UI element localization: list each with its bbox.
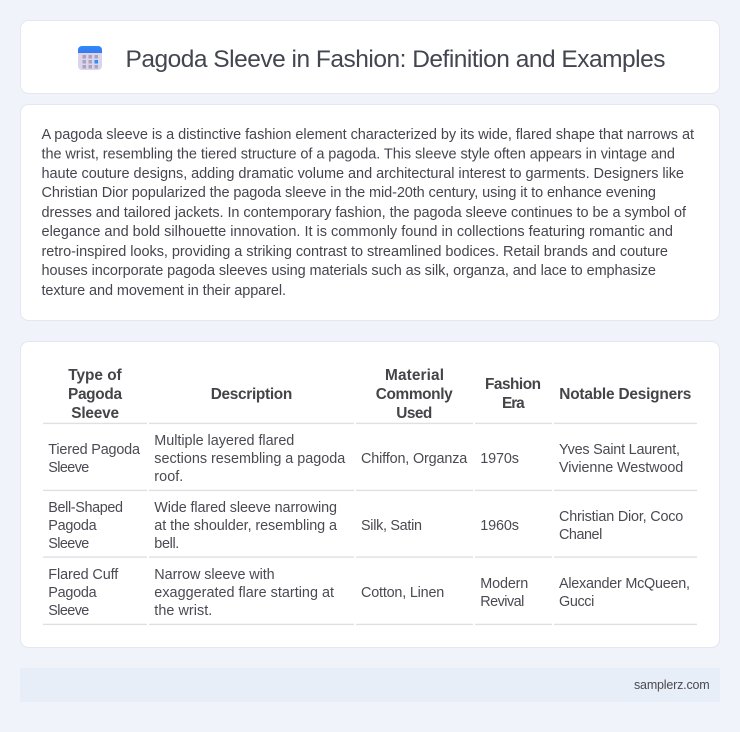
text block: description paragraph: A pagoda sleeve is a distinctive fashion element characterized by its wide, flared shape that narrows at <box>42 127 694 143</box>
footer bar <box>20 668 720 702</box>
table row: Tiered Pagoda Sleeve: Sleeve <box>48 460 89 476</box>
title: Pagoda Sleeve in Fashion: Definition and Examples <box>126 46 666 73</box>
table header row: Pagoda <box>68 386 122 403</box>
table row: Bell-Shaped Pagoda Sleeve: Pagoda <box>48 518 97 534</box>
table header row: Description <box>211 386 292 403</box>
table row: Tiered Pagoda Sleeve: roof. <box>154 469 183 485</box>
table row: Flared Cuff Pagoda Sleeve: Flared Cuff <box>48 567 119 583</box>
table row: Flared Cuff Pagoda Sleeve: Sleeve <box>48 603 89 619</box>
text block: description paragraph <box>42 127 694 299</box>
table row: Bell-Shaped Pagoda Sleeve: at the shoulder, resembling a <box>154 518 337 534</box>
table row: Flared Cuff Pagoda Sleeve: Narrow sleeve with <box>154 567 275 583</box>
table row: Flared Cuff Pagoda Sleeve: Pagoda <box>48 585 97 601</box>
table header row: Notable Designers <box>559 386 691 403</box>
table row: Bell-Shaped Pagoda Sleeve: 1960s <box>480 518 519 534</box>
table row: Flared Cuff Pagoda Sleeve: exaggerated flare starting at <box>154 585 334 601</box>
text block: description paragraph: Christian Dior popularized the pagoda sleeve in the mid-20th century, using it to enhance evening <box>42 185 656 201</box>
text block: description paragraph: haute couture designs, adding dramatic volume and architectural interest to garments. Designers like <box>42 166 684 182</box>
table row: Tiered Pagoda Sleeve: Yves Saint Laurent, <box>559 442 680 458</box>
table header row: Used <box>396 405 432 422</box>
table row: Bell-Shaped Pagoda Sleeve: Wide flared sleeve narrowing <box>154 500 337 516</box>
table header row: Fashion <box>485 376 541 393</box>
text block: description paragraph: texture and movement in their apparel. <box>42 283 286 299</box>
table header row <box>68 367 691 422</box>
table row: Bell-Shaped Pagoda Sleeve <box>48 500 683 552</box>
table row: Flared Cuff Pagoda Sleeve: Cotton, Linen <box>361 585 444 601</box>
text block: description paragraph: elegance and bold silhouette innovation. It is commonly found in collections featuring romantic and <box>42 224 673 240</box>
text block: description paragraph: retro-inspired looks, providing a striking contrast to streamlined bodices. Retail brands and couture <box>42 244 668 260</box>
text block: description paragraph: the wrist, resembling the tiered structure of a pagoda. This sleeve style often appears in vintage and <box>42 146 675 162</box>
table row: Flared Cuff Pagoda Sleeve: Modern <box>480 576 528 592</box>
table header row: Material <box>385 367 444 384</box>
table row: Bell-Shaped Pagoda Sleeve: bell. <box>154 536 179 552</box>
table row: Tiered Pagoda Sleeve: Vivienne Westwood <box>559 460 683 476</box>
panel: comparison table <box>20 342 720 648</box>
table row: Flared Cuff Pagoda Sleeve <box>48 567 690 619</box>
table row: Tiered Pagoda Sleeve <box>48 433 683 485</box>
panel: title header <box>20 20 720 94</box>
table header row: Sleeve <box>71 405 119 422</box>
text block: description paragraph: dresses and tailored jackets. In contemporary fashion, the pagoda sleeve continues to be a symbol of <box>42 205 687 221</box>
table header row: Era <box>502 395 525 412</box>
table row: Flared Cuff Pagoda Sleeve: Revival <box>480 594 524 610</box>
table header row: Commonly <box>376 386 453 403</box>
table row: Bell-Shaped Pagoda Sleeve: Christian Dior, Coco <box>559 509 683 525</box>
table row: Flared Cuff Pagoda Sleeve: Gucci <box>559 594 594 610</box>
footer text: samplerz.com <box>634 678 710 692</box>
table row: Tiered Pagoda Sleeve: Multiple layered flared <box>154 433 294 449</box>
table row: Flared Cuff Pagoda Sleeve: the wrist. <box>154 603 212 619</box>
text block: description paragraph: houses incorporate pagoda sleeves using materials such as silk, organza, and lace to emphasize <box>42 263 656 279</box>
icon: calendar <box>78 46 102 70</box>
table row: Bell-Shaped Pagoda Sleeve: Silk, Satin <box>361 518 422 534</box>
table row: Bell-Shaped Pagoda Sleeve: Sleeve <box>48 536 89 552</box>
panel: description <box>20 104 720 320</box>
table header row: Type of <box>68 367 123 384</box>
table row: Tiered Pagoda Sleeve: sections resembling a pagoda <box>154 451 345 467</box>
table row: Tiered Pagoda Sleeve: Chiffon, Organza <box>361 451 467 467</box>
table row: Tiered Pagoda Sleeve: Tiered Pagoda <box>48 442 140 458</box>
table row: Flared Cuff Pagoda Sleeve: Alexander McQueen, <box>559 576 690 592</box>
table row: Bell-Shaped Pagoda Sleeve: Bell-Shaped <box>48 500 123 516</box>
table row: Tiered Pagoda Sleeve: 1970s <box>480 451 519 467</box>
table row: Bell-Shaped Pagoda Sleeve: Chanel <box>559 527 602 543</box>
